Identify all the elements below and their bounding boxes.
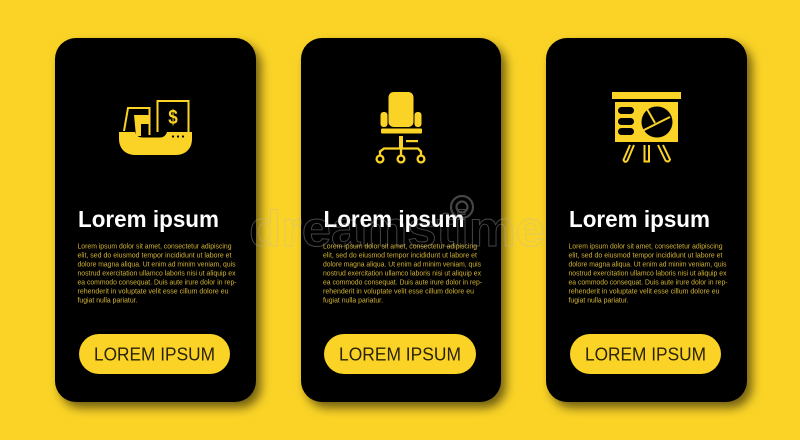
body text: Lorem ipsum dolor sit amet, consectetur adipiscing <box>568 244 723 250</box>
button: LOREM IPSUM <box>94 344 215 365</box>
body text: Lorem ipsum dolor sit amet, consectetur adipiscing <box>78 244 232 250</box>
icon: cargo ship with dollar container <box>119 101 192 155</box>
body text: rehenderit in voluptate velit esse cillum dolore eu <box>78 289 229 296</box>
body text: rehenderit in voluptate velit esse cillum dolore eu <box>323 289 474 296</box>
body text: ea commodo consequat. Duis aute irure dolor in rep- <box>78 280 237 287</box>
card 2 background <box>301 38 501 402</box>
heading: Lorem ipsum <box>569 206 710 232</box>
card 1 background <box>55 38 256 402</box>
panel: card 2 <box>301 38 501 402</box>
button: LOREM IPSUM <box>339 344 461 365</box>
body text: dolore magna aliqua. Ut enim ad minim veniam, quis <box>323 262 481 268</box>
body text: ea commodo consequat. Duis aute irure dolor in rep- <box>568 280 728 287</box>
heading: Lorem ipsum <box>78 206 219 232</box>
body text: rehenderit in voluptate velit esse cillum dolore eu <box>568 289 720 296</box>
body text: elit, sed do eiusmod tempor incididunt ut labore et <box>323 252 477 260</box>
button <box>570 334 721 374</box>
body text <box>78 244 237 305</box>
icon: office chair <box>377 92 424 162</box>
body text: dolore magna aliqua. Ut enim ad minim veniam, quis <box>568 262 727 268</box>
watermark: dreamstime <box>249 201 545 257</box>
heading: Lorem ipsum <box>324 206 464 232</box>
card 3 background <box>546 38 747 402</box>
button <box>79 334 230 374</box>
body text: nostrud exercitation ullamco laboris nisi ut aliquip ex <box>78 271 236 278</box>
body text: elit, sed do eiusmod tempor incididunt ut labore et <box>78 252 232 260</box>
body text: fugiat nulla pariatur. <box>78 298 138 305</box>
body text: fugiat nulla pariatur. <box>568 298 629 305</box>
panel: card 1 <box>55 38 256 402</box>
body text: elit, sed do eiusmod tempor incididunt ut labore et <box>568 252 723 260</box>
panel: card 3 <box>546 38 747 402</box>
body text: dolore magna aliqua. Ut enim ad minim veniam, quis <box>78 262 236 268</box>
body text: fugiat nulla pariatur. <box>323 298 383 305</box>
button <box>324 334 476 374</box>
body text: nostrud exercitation ullamco laboris nisi ut aliquip ex <box>568 271 727 278</box>
body text: Lorem ipsum dolor sit amet, consectetur adipiscing <box>323 244 477 250</box>
body text <box>568 244 728 305</box>
icon: cargo ship with dollar container: $ <box>168 107 178 129</box>
icon: presentation board with pie chart <box>612 92 681 162</box>
button: LOREM IPSUM <box>585 344 706 365</box>
body text: nostrud exercitation ullamco laboris nisi ut aliquip ex <box>323 271 481 278</box>
body text <box>323 244 483 305</box>
body text: ea commodo consequat. Duis aute irure dolor in rep- <box>323 280 483 287</box>
